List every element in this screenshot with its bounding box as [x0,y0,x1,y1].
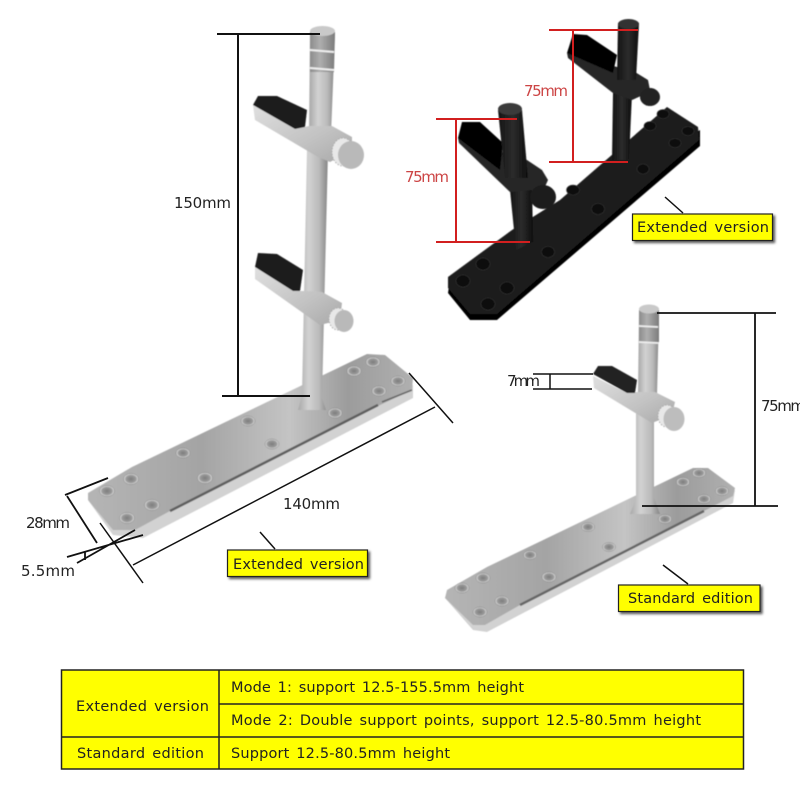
label: standard edition [618,565,760,612]
table row: mode 2: Mode 2: Double support points, support 12.5-80.5mm height [231,713,701,729]
standard base plate [445,468,735,632]
table row: extended version: Extended version [76,699,209,715]
dimension: red 75mm front: 75mm [405,168,449,186]
dimension: 150mm: 150mm [174,194,231,212]
dimension: 140mm [100,373,453,583]
dimension: 150mm [174,34,320,396]
dimension: red 75mm front [405,119,530,242]
dimension: 7mm [507,372,593,390]
upper arm and knob [253,96,364,169]
dimension: 75mm standard [642,313,800,506]
dimension: 140mm: 140mm [283,495,340,513]
rear black pole and arm [567,19,660,160]
label: extended version, left: Extended version [233,557,364,573]
dimension: red 75mm rear: 75mm [524,82,568,100]
dimension: 28mm and 5.5mm [21,478,143,580]
table row: standard support: Support 12.5-80.5mm height [231,746,450,762]
dimension: 28mm and 5.5mm: 28mm [26,514,70,532]
lower arm and knob [255,253,354,332]
dimension: 28mm and 5.5mm: 5.5mm [21,562,75,580]
standard pole [630,304,660,514]
pole [298,26,335,410]
dimension: 7mm: 7mm [507,372,540,390]
label: extended version, left [228,532,368,576]
extended version black stand [448,19,700,320]
front black pole and arm [458,103,556,250]
standard arm and knob [593,366,684,431]
extended version silver stand [88,26,413,538]
black base plate [448,107,700,320]
dimension: red 75mm rear [524,30,638,162]
label: extended version, top right: Extended version [637,220,769,236]
base plate [88,354,413,538]
standard edition silver stand [445,304,735,632]
label: extended version, top right [632,197,772,240]
specification table [62,670,744,769]
table row: mode 1: Mode 1: support 12.5-155.5mm height [231,680,524,696]
label: standard edition: Standard edition [628,591,753,607]
table row: standard edition: Standard edition [77,746,204,762]
